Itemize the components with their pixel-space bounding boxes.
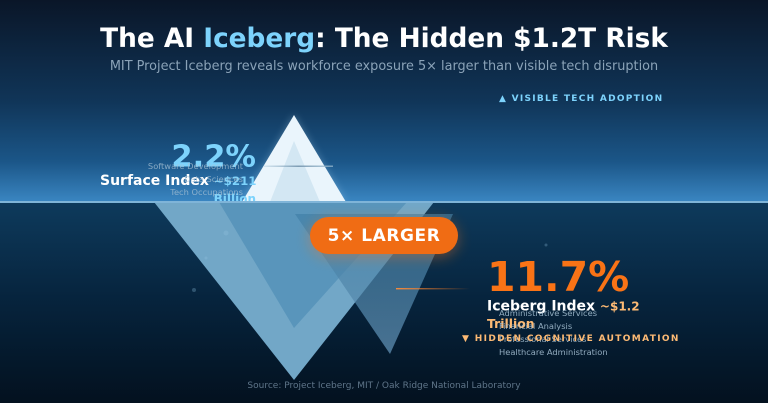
water particles — [192, 230, 548, 292]
waterline — [0, 201, 768, 203]
iceberg index label: Iceberg Index ~$1.2 — [487, 298, 640, 314]
iceberg percent: 11.7% — [487, 253, 629, 301]
surface occupations: Tech Occupations — [169, 187, 243, 197]
iceberg occupations: Professional Services — [499, 334, 586, 344]
surface value wrap: Billion — [214, 192, 256, 206]
ocean background — [0, 202, 768, 403]
iceberg below water — [154, 202, 453, 380]
source: Source: Project Iceberg, MIT / Oak Ridge National Laboratory — [247, 381, 521, 391]
surface occupations — [148, 161, 244, 197]
surface occupations: Data Sciences — [184, 174, 243, 184]
iceberg occupations: Financial Analysis — [499, 321, 572, 331]
iceberg value wrap: Trillion — [487, 316, 535, 331]
panel: surface index — [100, 140, 256, 206]
surface occupations: Software Development — [148, 161, 244, 171]
sky background — [0, 0, 768, 202]
iceberg occupations: Healthcare Administration — [499, 347, 608, 357]
iceberg above water — [242, 115, 346, 202]
subtitle: MIT Project Iceberg reveals workforce exposure 5× larger than visible tech disruption — [110, 59, 658, 74]
surface index label: Surface Index ~$211 — [100, 173, 256, 189]
iceberg occupations: Administrative Services — [499, 308, 597, 318]
title: The AI Iceberg: The Hidden $1.2T Risk — [100, 24, 669, 54]
surface percent: 2.2% — [171, 140, 256, 174]
callout: 5x larger — [310, 217, 458, 257]
label: hidden cognitive automation: ▼ HIDDEN COGNITIVE AUTOMATION — [462, 334, 680, 344]
label: visible tech adoption: ▲ VISIBLE TECH ADOPTION — [499, 94, 663, 104]
panel: iceberg index — [487, 253, 640, 357]
iceberg occupations — [499, 308, 608, 357]
connector line: iceberg — [396, 288, 470, 289]
connector line: surface — [264, 166, 333, 167]
callout: 5x larger: 5× LARGER — [328, 226, 440, 246]
